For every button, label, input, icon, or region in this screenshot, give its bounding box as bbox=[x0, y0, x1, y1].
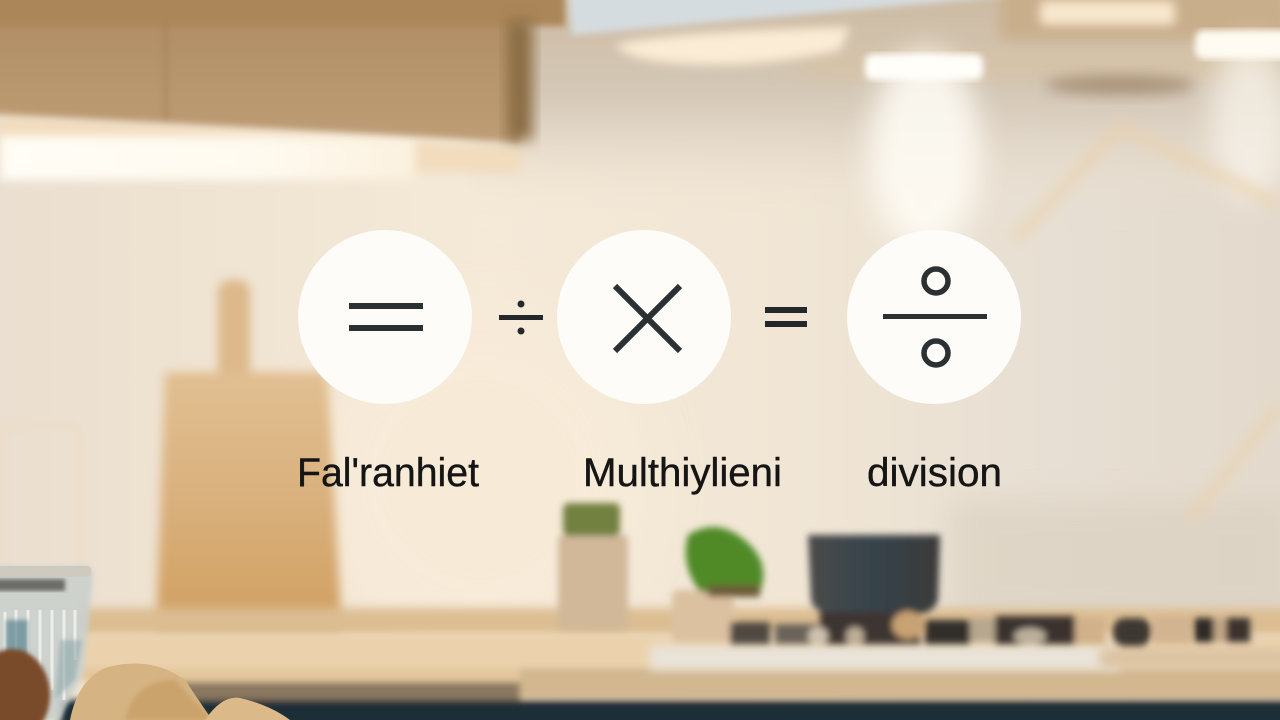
icon: multiplication circle bbox=[557, 230, 731, 404]
label: division: division bbox=[867, 451, 1002, 495]
countertop bbox=[60, 634, 1280, 720]
marble veins bbox=[1015, 128, 1280, 520]
cutting board bbox=[156, 280, 342, 632]
plants and pots bbox=[558, 503, 1250, 646]
hood light glow bbox=[870, 50, 980, 250]
glass bowl and bread bbox=[0, 566, 290, 720]
label: Fahrenheit: Fal'ranhiet bbox=[297, 451, 479, 495]
icon: small equals sign bbox=[765, 307, 807, 327]
icon: division circle bbox=[847, 230, 1021, 404]
label: Multiplication: Multhiylieni bbox=[583, 451, 782, 495]
under-cabinet light bbox=[0, 116, 520, 172]
warm wall glow bbox=[310, 310, 650, 650]
range hood bbox=[1000, 0, 1280, 40]
backsplash base bbox=[80, 608, 1280, 636]
icon: small division sign bbox=[499, 300, 543, 334]
upper cabinet bbox=[0, 0, 565, 142]
icon: equals sign circle bbox=[298, 230, 472, 404]
